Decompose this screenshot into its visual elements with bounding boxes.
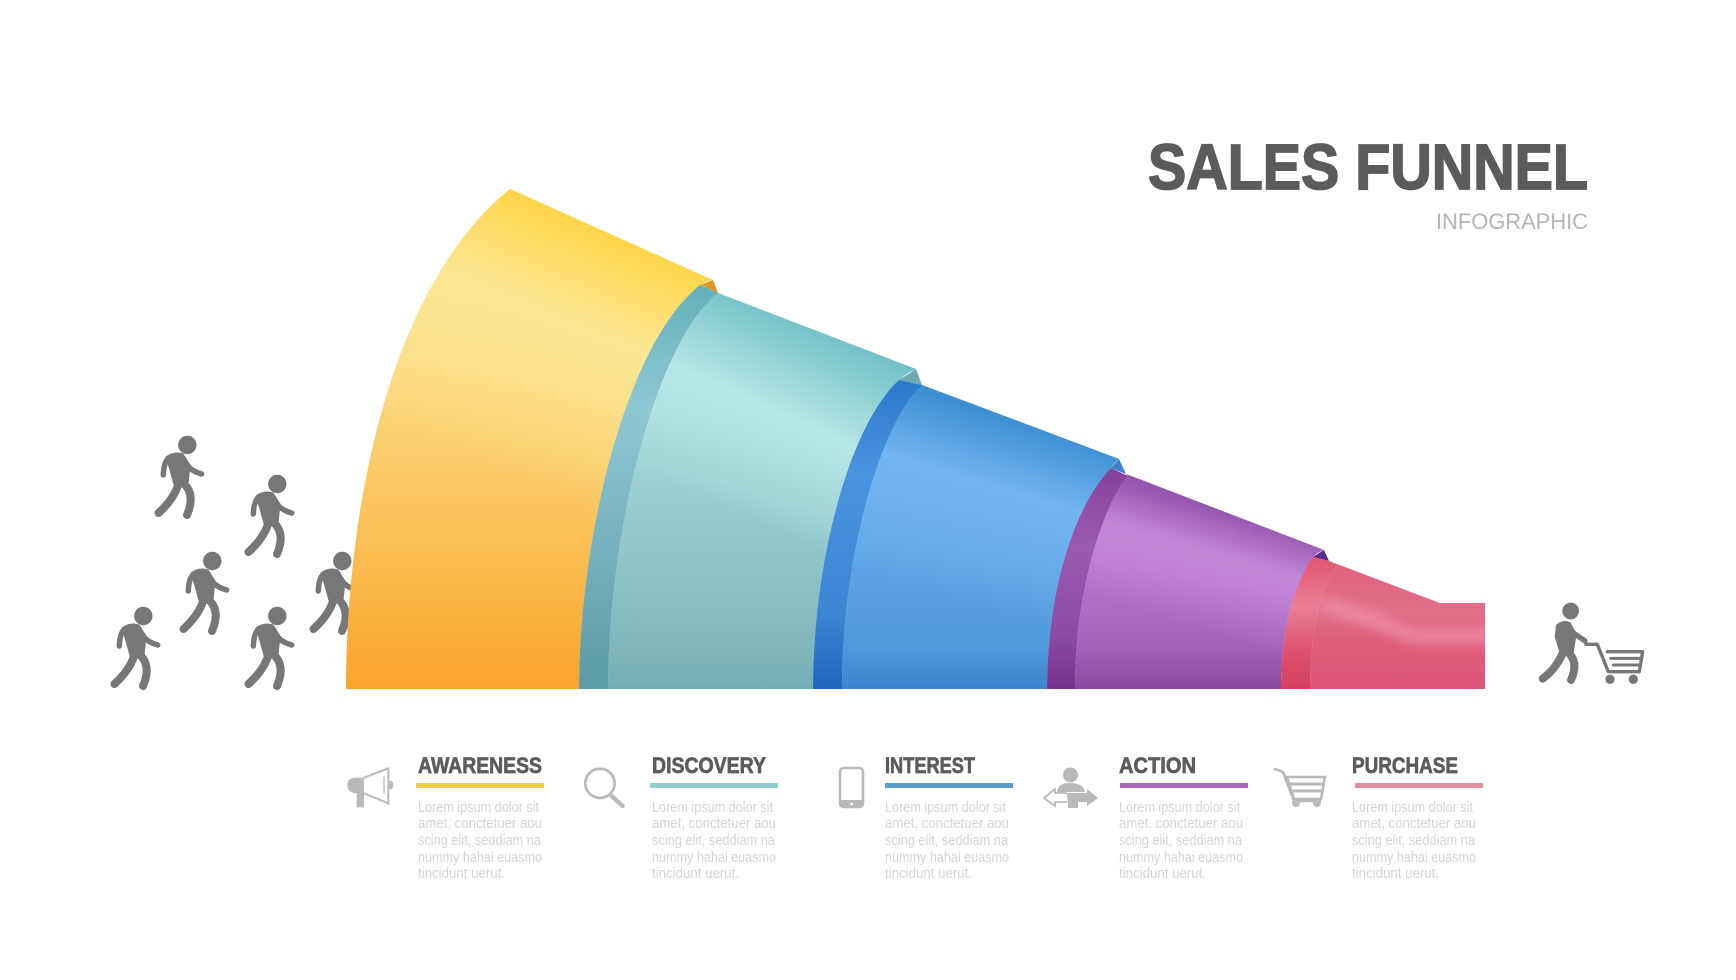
- text block: interest: tincidunt uerut.: [885, 866, 972, 882]
- text block: interest: [885, 800, 1009, 882]
- text block: awareness: nummy hahai euasmo: [418, 850, 542, 866]
- legend: interest: [840, 753, 1013, 882]
- funnel stage: purchase: [1281, 557, 1500, 689]
- underline: awareness: [416, 783, 544, 788]
- subtitle: INFOGRAPHIC: [1436, 209, 1588, 234]
- icon: smartphone: [840, 768, 863, 807]
- text block: discovery: Lorem ipsum dolor sit: [652, 800, 773, 816]
- text block: awareness: tincidunt uerut.: [418, 866, 505, 882]
- legend: action: [1044, 753, 1248, 882]
- text block: purchase: nummy hahai euasmo: [1352, 850, 1476, 866]
- legend: purchase: [1275, 753, 1483, 882]
- text block: discovery: scing elit, seddiam na: [652, 833, 776, 849]
- text block: awareness: Lorem ipsum dolor sit: [418, 800, 539, 816]
- text block: action: nummy hahai euasmo: [1119, 850, 1243, 866]
- underline: discovery: [650, 783, 778, 788]
- funnel stage: discovery: [579, 285, 922, 689]
- icons: group of walking people: [114, 436, 292, 686]
- text block: discovery: tincidunt uerut.: [652, 866, 739, 882]
- text block: interest: Lorem ipsum dolor sit: [885, 800, 1006, 816]
- icon: megaphone: [347, 768, 393, 807]
- text block: action: tincidunt uerut.: [1119, 866, 1206, 882]
- funnel stage: action: [1047, 468, 1329, 689]
- text block: discovery: nummy hahai euasmo: [652, 850, 776, 866]
- text block: action: amet, conctetuer aou: [1119, 816, 1243, 832]
- heading: action: ACTION: [1119, 753, 1196, 778]
- text block: interest: scing elit, seddiam na: [885, 833, 1009, 849]
- text block: interest: amet, conctetuer aou: [885, 816, 1009, 832]
- heading: purchase: PURCHASE: [1352, 753, 1458, 778]
- text block: interest: nummy hahai euasmo: [885, 850, 1009, 866]
- text block: purchase: scing elit, seddiam na: [1352, 833, 1476, 849]
- text block: awareness: scing elit, seddiam na: [418, 833, 542, 849]
- text block: purchase: tincidunt uerut.: [1352, 866, 1439, 882]
- text block: purchase: [1352, 800, 1476, 882]
- title: SALES FUNNEL: [1148, 131, 1588, 203]
- icon: shopping cart: [1275, 769, 1325, 807]
- legend: discovery: [585, 753, 778, 882]
- funnel stage: interest: [813, 380, 1126, 689]
- underline: action: [1120, 783, 1248, 788]
- text block: purchase: amet, conctetuer aou: [1352, 816, 1476, 832]
- underline: purchase: [1355, 783, 1483, 788]
- text block: discovery: amet, conctetuer aou: [652, 816, 776, 832]
- icon: person walking behind funnel: [314, 552, 357, 631]
- underline: interest: [885, 783, 1013, 788]
- text block: action: [1119, 800, 1243, 882]
- icon: person pushing shopping cart: [1543, 603, 1643, 684]
- heading: interest: INTEREST: [885, 753, 975, 778]
- icon: magnifier: [585, 769, 623, 806]
- text block: awareness: [418, 800, 542, 882]
- text block: awareness: amet, conctetuer aou: [418, 816, 542, 832]
- heading: awareness: AWARENESS: [418, 753, 542, 778]
- text block: purchase: Lorem ipsum dolor sit: [1352, 800, 1473, 816]
- funnel stage: awareness: [346, 189, 718, 689]
- text block: action: scing elit, seddiam na: [1119, 833, 1243, 849]
- text block: action: Lorem ipsum dolor sit: [1119, 800, 1240, 816]
- icon: person at crossroad arrows: [1044, 768, 1098, 808]
- text block: discovery: [652, 800, 776, 882]
- heading: discovery: DISCOVERY: [652, 753, 766, 778]
- legend: awareness: [347, 753, 544, 882]
- funnel chart: [346, 189, 1500, 689]
